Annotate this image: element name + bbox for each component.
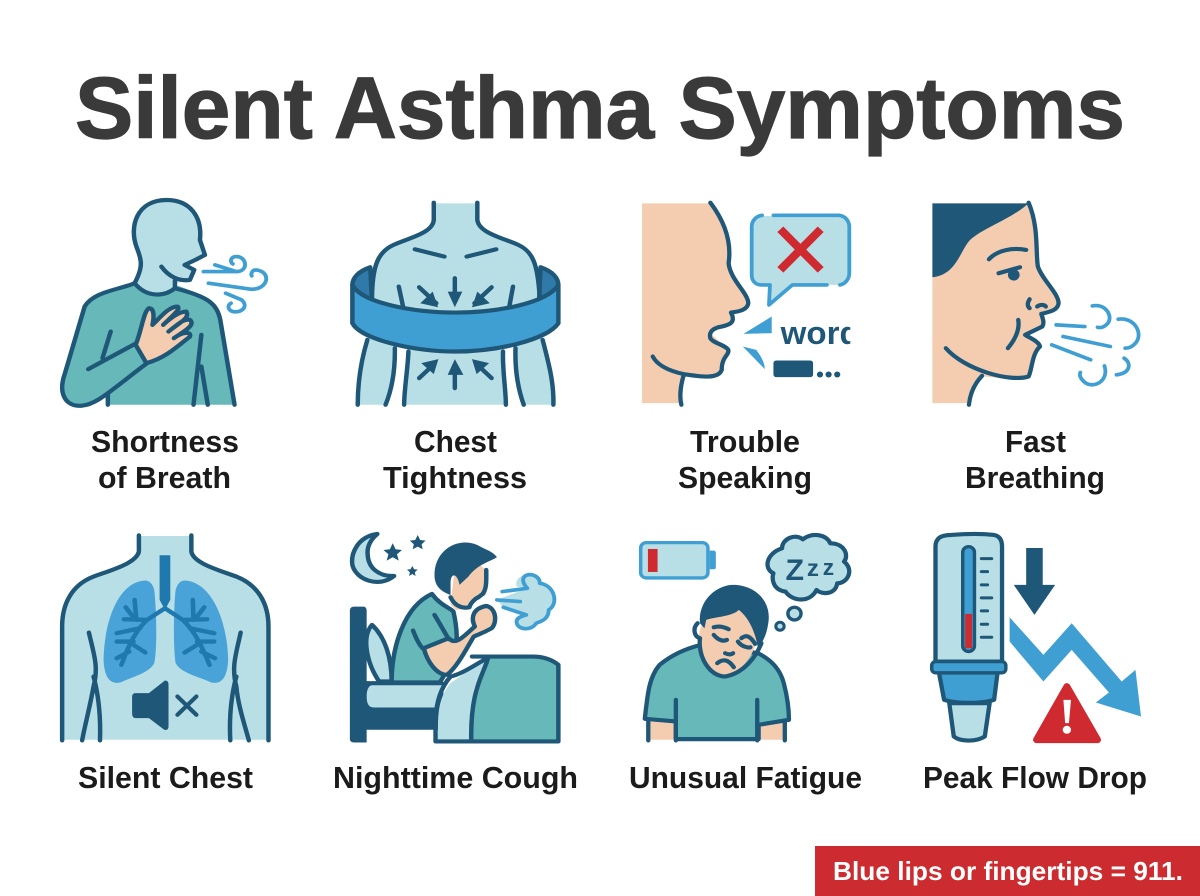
icon: peak flow meter — [932, 534, 1141, 741]
icon: falling zigzag arrow — [1010, 617, 1141, 716]
label: shortness of breath — [91, 424, 239, 495]
icon: pillow — [366, 625, 392, 682]
icon: breath lines — [1052, 306, 1139, 385]
panel: peak flow drop — [923, 534, 1147, 795]
label: shortness of breath: of Breath — [98, 460, 231, 495]
icon: head — [451, 558, 488, 610]
icon: face with hair — [932, 203, 1139, 405]
panel: silent chest — [62, 535, 268, 795]
meter collar and mouthpiece — [932, 662, 1006, 741]
icon: torso with lungs — [62, 535, 268, 740]
icon: thought cloud: Z — [786, 554, 804, 587]
icon: thought cloud: z — [807, 556, 819, 582]
panel: nighttime cough — [333, 534, 578, 795]
icon: thought cloud: z — [823, 555, 834, 580]
icon: muted speaker — [132, 681, 196, 730]
icon: arm and fist — [424, 606, 495, 675]
cut off word: word — [780, 315, 860, 351]
panel: trouble speaking — [642, 203, 860, 495]
meter gauge — [963, 547, 992, 652]
label: trouble speaking — [678, 424, 812, 495]
icon: speech bubble with X — [751, 216, 849, 305]
label: fast breathing: Fast — [1005, 424, 1066, 459]
label: chest tightness — [383, 424, 527, 495]
icon: eye — [1008, 269, 1020, 281]
label: trouble speaking: Trouble — [690, 424, 800, 459]
icon: belt band — [352, 285, 558, 352]
icon: bed frame — [350, 607, 443, 742]
panel: shortness of breath — [62, 200, 266, 495]
label: fast breathing: Breathing — [965, 460, 1105, 495]
icon: mattress — [367, 685, 443, 707]
panel: chest tightness — [352, 203, 558, 495]
icon: belt back — [352, 267, 558, 302]
label: shortness of breath: Shortness — [91, 424, 239, 459]
meter body — [935, 534, 1002, 662]
icon: person coughing in bed — [350, 534, 558, 742]
icon: low battery — [641, 543, 716, 578]
panel: unusual fatigue — [629, 535, 862, 795]
icon: hand — [136, 307, 192, 363]
icon: torso with belt — [352, 203, 558, 405]
icon: lungs — [104, 581, 228, 683]
icon: breath swirls — [204, 257, 266, 312]
label: peak flow drop: Peak Flow Drop — [923, 760, 1147, 795]
icon: warning triangle — [1037, 686, 1098, 740]
icon: redacted bar and dots — [773, 360, 840, 377]
label: fast breathing — [965, 424, 1105, 495]
icon: tired person — [641, 535, 849, 740]
panel: fast breathing — [932, 203, 1139, 495]
icon: sound wedges — [743, 317, 772, 369]
icon: shirt — [649, 720, 786, 740]
icon: stars — [383, 535, 426, 576]
label: chest tightness: Tightness — [383, 460, 527, 495]
icon: moon — [352, 534, 394, 582]
label: trouble speaking: Speaking — [678, 460, 812, 495]
callout: emergency warning — [815, 846, 1200, 896]
callout: emergency warning: Blue lips or fingertips = 911. — [833, 856, 1183, 886]
icon: head — [698, 607, 758, 677]
icon: thought cloud — [768, 535, 849, 630]
icon: cough cloud — [497, 574, 554, 629]
icon: torso — [392, 594, 457, 683]
icon: blanket — [438, 658, 488, 742]
icon: person holding chest — [62, 200, 266, 406]
label: silent chest: Silent Chest — [78, 760, 253, 795]
icon: down arrow — [1014, 548, 1055, 615]
label: chest tightness: Chest — [414, 424, 497, 459]
icon: face profile — [642, 203, 860, 405]
title: Silent Asthma Symptoms — [75, 60, 1125, 157]
icon: pressure arrows — [419, 278, 492, 388]
label: unusual fatigue: Unusual Fatigue — [629, 760, 862, 795]
label: nighttime cough: Nighttime Cough — [333, 760, 578, 795]
